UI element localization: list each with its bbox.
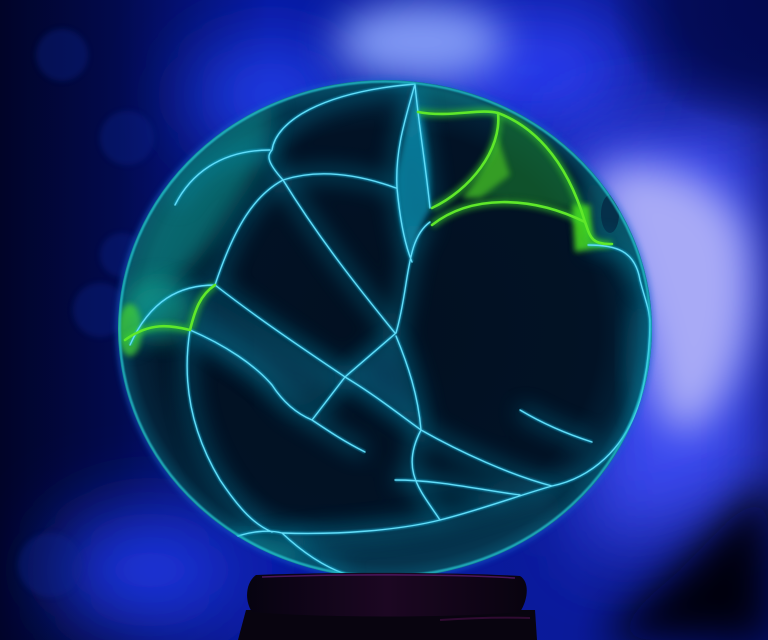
plasma glow and veins — [118, 82, 654, 578]
base — [238, 573, 537, 640]
sphere body — [118, 80, 652, 578]
teal haze — [125, 100, 275, 320]
bokeh circles — [18, 29, 154, 597]
globe — [116, 78, 654, 580]
rim light — [120, 82, 650, 576]
sharp blue veins — [130, 84, 650, 574]
blurred vein halo — [130, 84, 650, 574]
green haze — [462, 115, 582, 212]
dark dimple — [601, 195, 619, 233]
sphere outer glow — [116, 78, 654, 580]
sharp green veins — [125, 112, 612, 340]
